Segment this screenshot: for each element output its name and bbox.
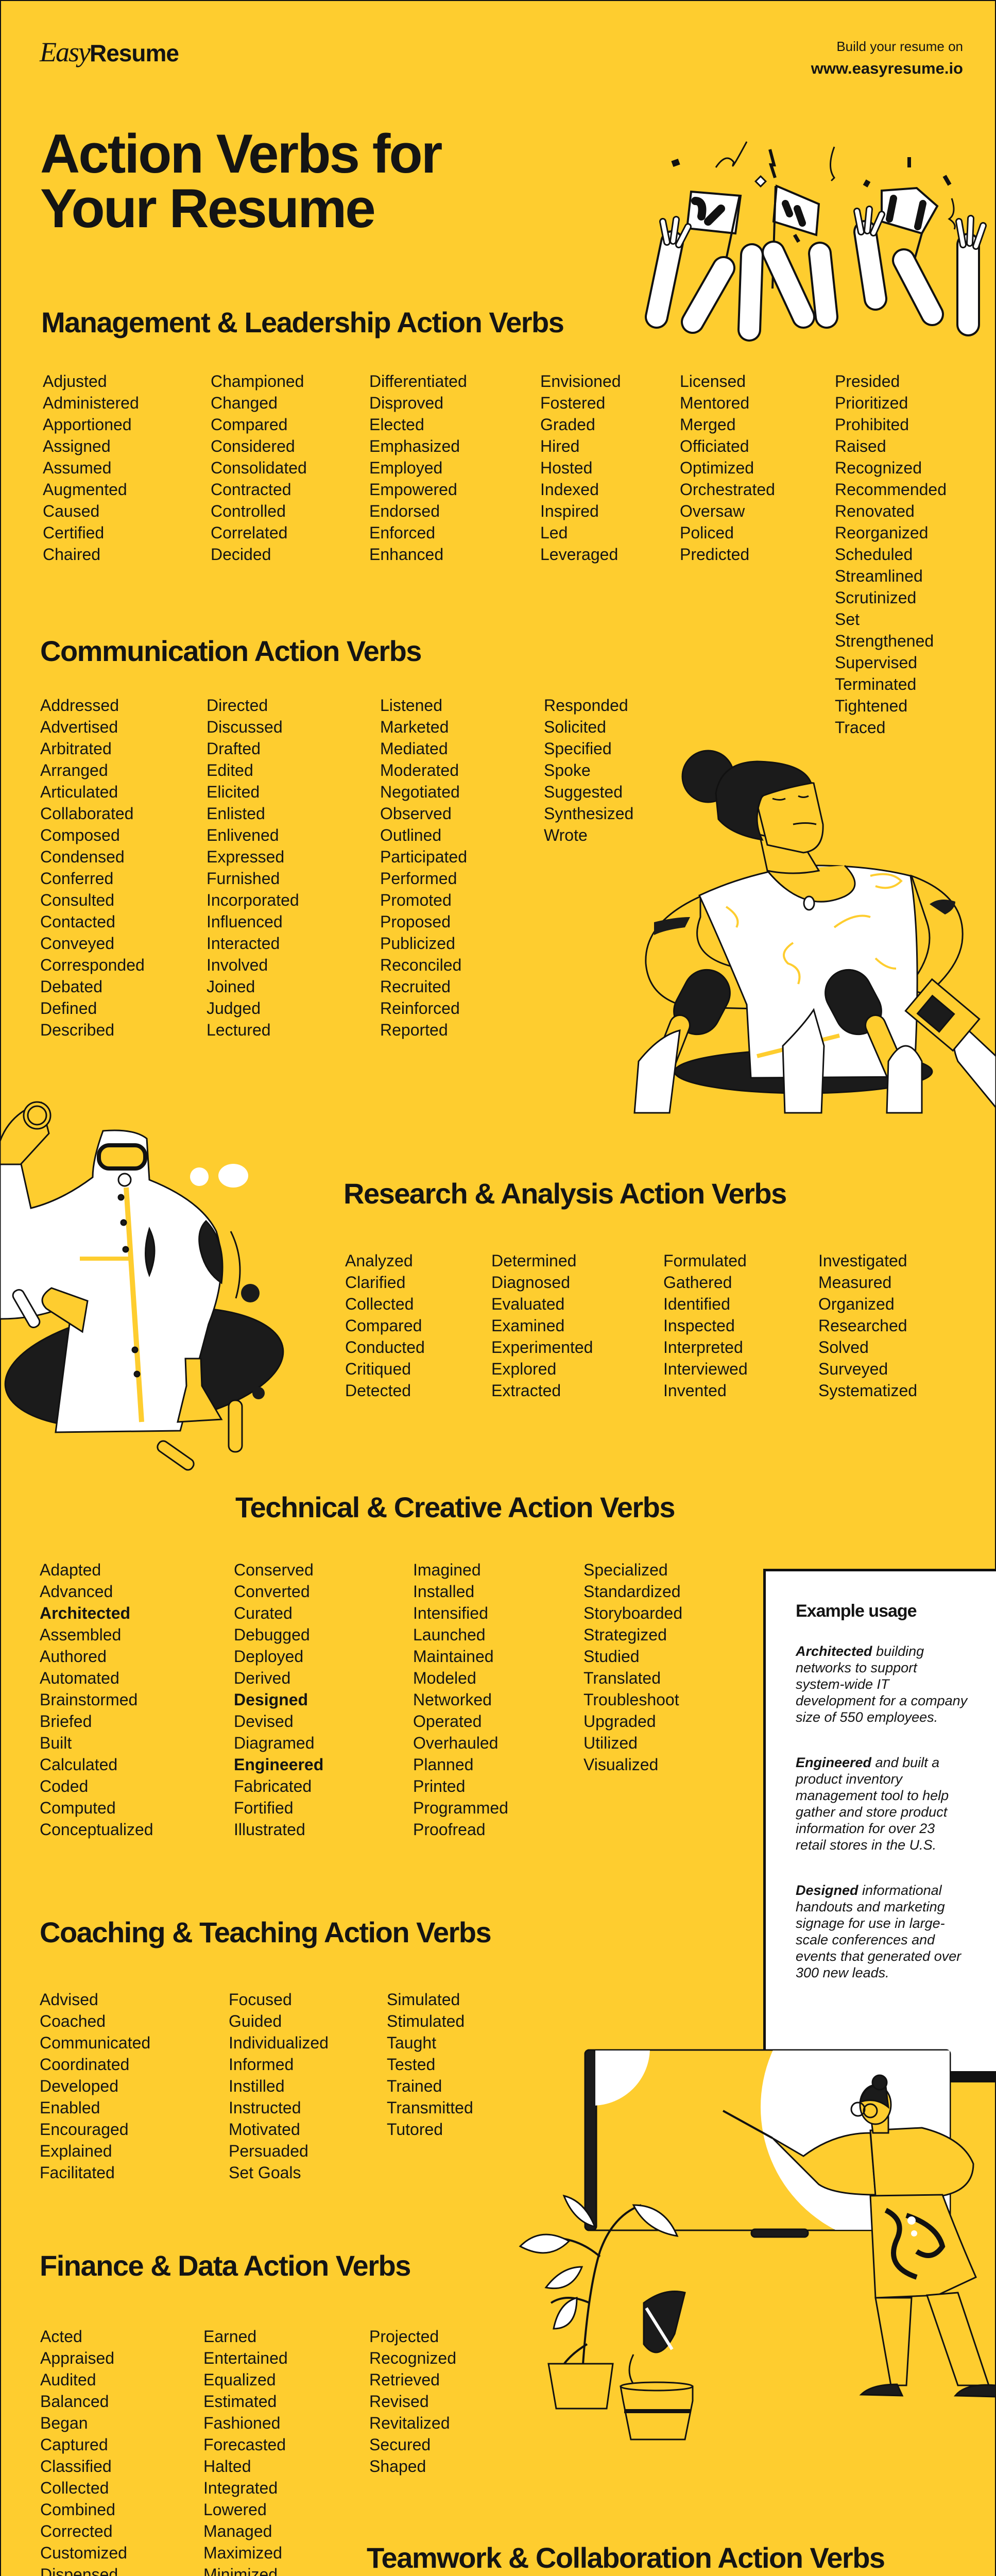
word list: technical: Converted [234,1582,310,1601]
word list: management: Hired [540,437,579,455]
word list: communication: Arranged [40,761,108,779]
word list: management: Terminated [835,675,916,693]
word list: finance: Maximized [203,2544,282,2562]
word list: management: Contracted [211,480,291,499]
word list: research: Analyzed [345,1251,413,1270]
word list: coaching: Coordinated [40,2055,129,2074]
word list: research: Compared [345,1316,422,1335]
word list: communication: Enlisted [207,804,265,823]
example 3: Designed informational handouts and marketing signage for use in large-scale conferences and events that generated over 300 new leads. [796,1883,961,1980]
word list: technical: Coded [40,1777,88,1795]
word list: management: Enforced [369,523,435,542]
word list: management: Recommended [835,480,947,499]
word list: management: Elected [369,415,424,434]
word list: coaching: Guided [229,2012,282,2030]
word list: technical: Architected [40,1604,130,1622]
word list: communication: Discussed [207,718,283,736]
word list: communication: Defined [40,999,97,1018]
word list: research: Experimented [491,1338,593,1357]
word list: communication: Recruited [380,977,451,996]
word list: coaching: Instructed [229,2098,301,2117]
word list: research: Solved [818,1338,869,1357]
illustration: woman with microphones [633,750,995,1114]
header link text: Build your resume on [836,39,963,54]
word list: management: Merged [680,415,735,434]
word list: communication: Elicited [207,783,260,801]
word list: coaching: Stimulated [387,2012,465,2030]
word list: coaching: Developed [40,2077,118,2095]
word list: finance: Customized [40,2544,127,2562]
word list: management: Scrutinized [835,588,916,607]
word list: communication: Reinforced [380,999,460,1018]
word list: management: Supervised [835,653,917,672]
word list: technical: Troubleshoot [583,1690,679,1709]
word list: communication: Reported [380,1021,448,1039]
word list: coaching [40,1990,473,2182]
word list: communication: Solicited [544,718,606,736]
word list: communication: Composed [40,826,120,844]
word list: coaching: Taught [387,2033,436,2052]
word list: technical: Advanced [40,1582,113,1601]
word list: finance: Integrated [203,2479,278,2497]
word list: technical: Installed [413,1582,474,1601]
illustration: teacher at board with plants [519,2049,995,2440]
word list: finance: Collected [40,2479,109,2497]
word list: management: Augmented [43,480,127,499]
word list: technical: Utilized [583,1734,638,1752]
word list: finance: Appraised [40,2349,114,2367]
word list: communication: Influenced [207,912,283,931]
word list: technical: Curated [234,1604,293,1622]
word list: finance: Secured [369,2435,431,2454]
word list: research [345,1251,917,1400]
word list: management: Oversaw [680,502,745,520]
word list: management: Changed [211,394,278,412]
word list: research: Formulated [663,1251,747,1270]
word list: technical: Adapted [40,1561,101,1579]
word list: technical: Conceptualized [40,1820,153,1839]
word list: research: Systematized [818,1381,917,1400]
word list: coaching: Individualized [229,2033,329,2052]
word list: management: Compared [211,415,287,434]
word list: management: Employed [369,459,442,477]
word list: technical: Assembled [40,1625,121,1644]
word list: management: Envisioned [540,372,621,391]
word list: management: Set [835,610,860,629]
heading: communication: Communication Action Verbs [40,635,421,667]
word list: technical: Programmed [413,1799,508,1817]
word list: management: Presided [835,372,900,391]
word list: finance: Retrieved [369,2370,440,2389]
word list: management: Officiated [680,437,749,455]
word list: communication: Synthesized [544,804,633,823]
word list: finance: Revised [369,2392,429,2411]
word list: coaching: Facilitated [40,2163,115,2182]
word list: communication: Moderated [380,761,459,779]
word list: technical: Standardized [583,1582,681,1601]
word list: management: Predicted [680,545,749,564]
word list: finance: Acted [40,2327,82,2346]
word list: communication: Observed [380,804,452,823]
word list: management: Leveraged [540,545,618,564]
title [40,123,442,239]
word list: technical: Strategized [583,1625,667,1644]
title: Action Verbs for [40,123,441,184]
word list: communication: Advertised [40,718,118,736]
word list: management: Caused [43,502,99,520]
word list: technical: Illustrated [234,1820,305,1839]
word list: management: Indexed [540,480,599,499]
word list: communication: Conveyed [40,934,114,953]
word list: research: Explored [491,1360,556,1378]
word list: finance: Estimated [203,2392,277,2411]
callout: example usage [763,1569,996,2082]
word list: management: Optimized [680,459,754,477]
word list: technical: Intensified [413,1604,488,1622]
word list: communication: Incorporated [207,891,299,909]
word list: technical: Diagramed [234,1734,315,1752]
word list: finance: Shaped [369,2457,426,2476]
word list: management: Chaired [43,545,100,564]
word list: finance: Audited [40,2370,96,2389]
word list: communication: Edited [207,761,253,779]
word list: management: Championed [211,372,304,391]
word list: technical: Translated [583,1669,661,1687]
word list: management: Differentiated [369,372,467,391]
word list: coaching: Persuaded [229,2142,308,2160]
word list: finance: Halted [203,2457,251,2476]
word list: technical [40,1561,682,1839]
word list: communication: Judged [207,999,261,1018]
heading: finance: Finance & Data Action Verbs [40,2249,410,2282]
word list: finance: Lowered [203,2500,267,2519]
title: Your Resume [40,177,374,239]
word list: technical: Derived [234,1669,290,1687]
word list: management: Licensed [680,372,746,391]
word list: research: Extracted [491,1381,561,1400]
word list: communication: Interacted [207,934,280,953]
word list: communication: Promoted [380,891,452,909]
word list: management: Inspired [540,502,599,520]
word list: technical: Debugged [234,1625,310,1644]
word list: finance: Earned [203,2327,256,2346]
word list: technical: Briefed [40,1712,92,1731]
word list: communication: Conferred [40,869,113,888]
word list: research: Surveyed [818,1360,888,1378]
word list: research: Conducted [345,1338,425,1357]
word list: technical: Specialized [583,1561,668,1579]
heading: teamwork: Teamwork & Collaboration Action Verbs [367,2541,885,2574]
word list: coaching: Advised [40,1990,98,2009]
word list: coaching: Set Goals [229,2163,301,2182]
word list: technical: Upgraded [583,1712,656,1731]
word list: communication: Spoke [544,761,591,779]
word list: management: Considered [211,437,295,455]
word list: management: Enhanced [369,545,443,564]
word list: communication: Involved [207,956,268,974]
word list: communication: Participated [380,848,467,866]
word list: coaching: Coached [40,2012,106,2030]
word list: management: Tightened [835,697,907,715]
word list: coaching: Motivated [229,2120,300,2139]
word list: communication: Negotiated [380,783,460,801]
word list: finance: Began [40,2414,88,2432]
word list: finance: Revitalized [369,2414,450,2432]
word list: management: Renovated [835,502,915,520]
word list: research: Identified [663,1295,730,1313]
word list: technical: Studied [583,1647,640,1666]
word list: technical: Fortified [234,1799,294,1817]
word list: technical: Authored [40,1647,107,1666]
word list: research: Clarified [345,1273,405,1292]
word list: research: Interviewed [663,1360,748,1378]
word list: research: Investigated [818,1251,907,1270]
word list: research: Evaluated [491,1295,564,1313]
illustration: scientist [1,1101,284,1470]
word list: communication: Outlined [380,826,441,844]
word list: technical: Visualized [583,1755,658,1774]
word list: technical: Computed [40,1799,116,1817]
word list: finance: Corrected [40,2522,112,2540]
word list: technical: Proofread [413,1820,486,1839]
word list: research: Detected [345,1381,411,1400]
word list: management: Correlated [211,523,287,542]
word list: communication: Lectured [207,1021,271,1039]
word list: coaching: Trained [387,2077,442,2095]
word list: research: Diagnosed [491,1273,570,1292]
heading: coaching: Coaching & Teaching Action Verbs [40,1916,491,1948]
word list: technical: Built [40,1734,72,1752]
word list: communication: Specified [544,739,612,758]
word list: research: Researched [818,1316,907,1335]
word list: technical: Planned [413,1755,473,1774]
word list: finance: Captured [40,2435,108,2454]
word list: communication: Drafted [207,739,261,758]
word list: research: Determined [491,1251,576,1270]
word list: communication: Expressed [207,848,284,866]
word list: research: Inspected [663,1316,735,1335]
word list: management: Disproved [369,394,443,412]
word list: finance [40,2327,456,2576]
word list: technical: Operated [413,1712,482,1731]
word list: communication: Arbitrated [40,739,112,758]
word list: management: Assigned [43,437,111,455]
word list: management: Reorganized [835,523,928,542]
word list: technical: Overhauled [413,1734,498,1752]
header link text [811,39,963,77]
word list: communication: Articulated [40,783,118,801]
word list: finance: Fashioned [203,2414,280,2432]
word list: communication: Performed [380,869,457,888]
word list: finance: Classified [40,2457,112,2476]
word list: management: Recognized [835,459,922,477]
word list: communication: Mediated [380,739,448,758]
word list: communication: Consulted [40,891,114,909]
word list: coaching: Tested [387,2055,435,2074]
word list: communication: Debated [40,977,102,996]
word list: management: Policed [680,523,734,542]
word list: technical: Designed [234,1690,308,1709]
word list: communication: Responded [544,696,628,715]
word list: communication: Publicized [380,934,455,953]
word list: management [43,372,947,737]
word list: coaching: Communicated [40,2033,150,2052]
word list: management: Adjusted [43,372,107,391]
heading: research: Research & Analysis Action Verbs [344,1177,786,1210]
word list: finance: Equalized [203,2370,276,2389]
word list: technical: Devised [234,1712,294,1731]
word list: technical: Deployed [234,1647,303,1666]
word list: management: Raised [835,437,886,455]
word list: communication: Enlivened [207,826,279,844]
word list: management: Traced [835,718,885,737]
word list: management: Apportioned [43,415,132,434]
word list: finance: Managed [203,2522,272,2540]
word list: communication: Collaborated [40,804,133,823]
word list: coaching: Explained [40,2142,112,2160]
word list: communication: Reconciled [380,956,461,974]
logo: header: EasyResume [40,37,179,67]
word list: research: Gathered [663,1273,732,1292]
word list: coaching: Encouraged [40,2120,129,2139]
word list: finance: Forecasted [203,2435,286,2454]
word list: finance: Entertained [203,2349,288,2367]
word list: communication: Condensed [40,848,125,866]
word list: finance: Recognized [369,2349,456,2367]
word list: technical: Modeled [413,1669,476,1687]
word list: finance: Projected [369,2327,439,2346]
header link text: www.easyresume.io [811,59,963,77]
word list: technical: Networked [413,1690,492,1709]
word list: communication: Furnished [207,869,280,888]
heading: management: Management & Leadership Action Verbs [41,306,563,338]
word list: communication: Addressed [40,696,119,715]
word list: technical: Conserved [234,1561,314,1579]
word list: communication: Marketed [380,718,449,736]
word list: coaching: Simulated [387,1990,460,2009]
word list: technical: Engineered [234,1755,323,1774]
word list: technical: Calculated [40,1755,117,1774]
word list: technical: Launched [413,1625,486,1644]
callout heading: Example usage [796,1601,917,1621]
word list: coaching: Informed [229,2055,294,2074]
word list: management: Certified [43,523,104,542]
example 1: Architected building networks to support system-wide IT development for a company size of 550 employees. [796,1643,967,1725]
word list: technical: Fabricated [234,1777,312,1795]
word list: management: Prioritized [835,394,908,412]
word list: management: Hosted [540,459,592,477]
word list: management: Mentored [680,394,749,412]
example 2: Engineered and built a product inventory management tool to help gather and store product information for over 23 retail stores in the U.S. [796,1755,949,1853]
illustration: hands with flags [645,141,987,342]
word list: management: Orchestrated [680,480,775,499]
word list: technical: Brainstormed [40,1690,138,1709]
word list: coaching: Focused [229,1990,292,2009]
word list: management: Prohibited [835,415,909,434]
word list: technical: Storyboarded [583,1604,682,1622]
word list: management: Consolidated [211,459,307,477]
word list: technical: Maintained [413,1647,494,1666]
word list: coaching: Instilled [229,2077,284,2095]
word list: coaching: Transmitted [387,2098,473,2117]
word list: management: Graded [540,415,595,434]
word list: management: Administered [43,394,139,412]
word list: technical: Automated [40,1669,119,1687]
word list: management: Empowered [369,480,457,499]
word list: communication: Joined [207,977,255,996]
word list: finance: Combined [40,2500,115,2519]
word list: research: Organized [818,1295,895,1313]
word list: research: Collected [345,1295,414,1313]
word list: management: Fostered [540,394,605,412]
word list: communication: Listened [380,696,442,715]
word list: coaching: Tutored [387,2120,443,2139]
word list: communication: Contacted [40,912,115,931]
word list: management: Led [540,523,568,542]
word list: communication: Suggested [544,783,623,801]
word list: research: Examined [491,1316,564,1335]
word list: communication: Proposed [380,912,451,931]
word list: communication [40,696,633,1039]
word list: research: Invented [663,1381,727,1400]
word list: finance: Balanced [40,2392,109,2411]
word list: technical: Printed [413,1777,465,1795]
word list: research: Interpreted [663,1338,743,1357]
word list: research: Measured [818,1273,891,1292]
word list: management: Assumed [43,459,111,477]
word list: coaching: Enabled [40,2098,100,2117]
word list: management: Strengthened [835,632,934,650]
word list: research: Critiqued [345,1360,411,1378]
word list: management: Emphasized [369,437,460,455]
word list: communication: Wrote [544,826,588,844]
word list: communication: Corresponded [40,956,145,974]
word list: management: Controlled [211,502,286,520]
word list: management: Scheduled [835,545,913,564]
word list: management: Streamlined [835,567,923,585]
word list: communication: Directed [207,696,268,715]
word list: management: Decided [211,545,271,564]
word list: technical: Imagined [413,1561,481,1579]
heading: technical: Technical & Creative Action Verbs [235,1491,675,1523]
word list: communication: Described [40,1021,114,1039]
word list: management: Endorsed [369,502,440,520]
